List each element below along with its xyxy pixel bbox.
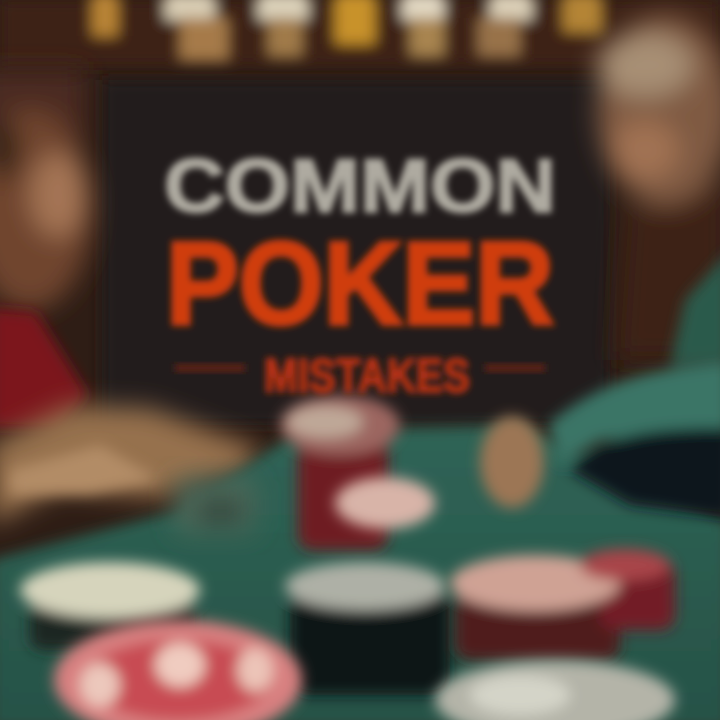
right person hand bbox=[480, 416, 544, 508]
left person bbox=[0, 70, 92, 310]
right person bbox=[597, 15, 720, 360]
right red chip stack bbox=[450, 549, 675, 660]
board subtitle: mistakes: MISTAKES bbox=[264, 350, 470, 403]
glass left bbox=[175, 478, 255, 533]
bottom white chips bbox=[435, 660, 675, 720]
board side dashes bbox=[175, 364, 545, 372]
board title: poker: POKER bbox=[166, 218, 554, 350]
left person arm and hand bbox=[0, 405, 258, 525]
centre dark chip stack bbox=[285, 562, 450, 695]
left person red shirt bbox=[0, 308, 88, 430]
left hand highlight bbox=[10, 445, 160, 495]
white chip on centre stack bbox=[335, 477, 435, 529]
right person green sleeve bbox=[548, 250, 720, 518]
bottom pink poker chip bbox=[54, 620, 302, 720]
left white chip stack bbox=[20, 562, 200, 650]
centre red chip stack bbox=[280, 395, 400, 550]
board bbox=[102, 80, 610, 425]
board title: common: COMMON bbox=[164, 144, 556, 229]
top lights strip bbox=[0, 0, 720, 66]
table bbox=[0, 425, 720, 720]
